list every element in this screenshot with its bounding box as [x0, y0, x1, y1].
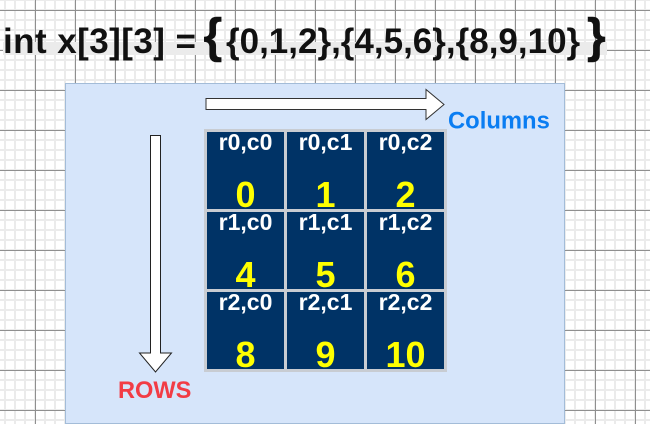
title: array declaration: int x[3][3] = — [3, 22, 196, 61]
cell r2,c0 — [207, 289, 284, 375]
cell r1,c0 — [207, 209, 284, 295]
cell r2,c0: 8 — [235, 334, 256, 375]
table: 3x3 array — [204, 129, 447, 375]
cell r1,c0: r1,c0 — [219, 209, 272, 235]
cell r1,c2: 6 — [395, 254, 416, 295]
cell r2,c2: r2,c2 — [379, 289, 432, 315]
label: Columns: Columns — [448, 108, 550, 134]
title: array declaration: {0,1,2},{4,5,6},{8,9,10} — [226, 22, 581, 61]
cell r0,c1: r0,c1 — [299, 129, 353, 155]
cell r1,c1 — [287, 209, 364, 295]
cell r1,c0: 4 — [235, 254, 256, 295]
cell r2,c1 — [287, 289, 364, 375]
cell r2,c2 — [367, 289, 444, 375]
cell r0,c1 — [287, 129, 364, 215]
cell r0,c1: 1 — [315, 174, 336, 215]
title: array declaration: { — [204, 10, 222, 63]
cell r0,c2: r0,c2 — [379, 129, 432, 155]
cell r0,c0: 0 — [235, 174, 256, 215]
panel: array diagram background — [66, 84, 564, 424]
title: array declaration — [3, 10, 607, 63]
arrow: columns direction — [206, 90, 444, 120]
cell r2,c0: r2,c0 — [219, 289, 272, 315]
cell r2,c2: 10 — [385, 334, 426, 375]
cell r2,c1: r2,c1 — [299, 289, 353, 315]
cell r1,c2: r1,c2 — [379, 209, 432, 235]
arrow: rows direction — [140, 136, 172, 372]
cell r1,c1: 5 — [315, 254, 336, 295]
label: ROWS: ROWS — [118, 378, 191, 404]
cell r1,c2 — [367, 209, 444, 295]
cell r0,c0 — [207, 129, 284, 215]
cell r2,c1: 9 — [315, 334, 336, 375]
cell r0,c2: 2 — [395, 174, 416, 215]
cell r0,c0: r0,c0 — [219, 129, 272, 155]
title: array declaration: } — [587, 10, 606, 63]
cell r1,c1: r1,c1 — [299, 209, 353, 235]
cell r0,c2 — [367, 129, 444, 215]
